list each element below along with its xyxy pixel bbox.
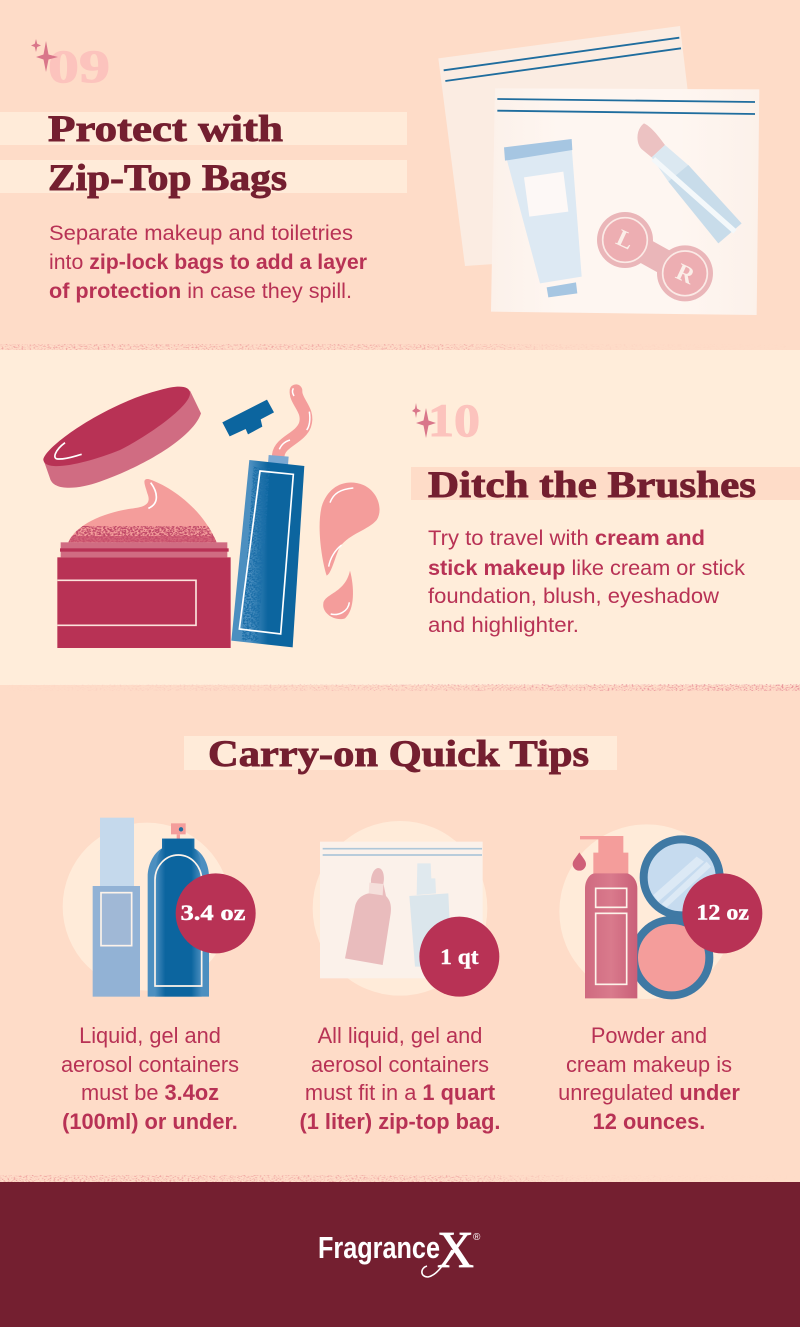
body text: Try to travel with cream and	[428, 527, 705, 550]
badge: 12 oz: 12 oz	[696, 899, 749, 924]
icon: lotion tube	[504, 139, 582, 297]
panel: section 09 background	[0, 0, 800, 350]
body text	[49, 222, 367, 303]
icon: jar	[57, 542, 231, 648]
heading: Carry-on Quick Tips: Carry-on Quick Tips	[208, 734, 589, 775]
text: powder and cream: Powder and	[591, 1023, 707, 1048]
panel: quick tips background	[0, 685, 800, 1182]
illustration: zip-top bags	[438, 26, 759, 315]
panel: tip 12 oz	[558, 824, 762, 1134]
icon: contact lens case: R	[672, 259, 699, 290]
panel: tip 09 text	[0, 39, 407, 303]
panel: tip 10 text	[411, 395, 800, 637]
panel: section 10 background	[0, 350, 800, 685]
number 10 with sparkle	[412, 395, 480, 447]
front bag	[491, 88, 759, 315]
back bag	[438, 26, 700, 266]
panel: tip 1 qt	[299, 821, 501, 1134]
body text: foundation, blush, eyeshadow	[428, 585, 720, 608]
body text: and highlighter.	[428, 614, 579, 637]
text: liquid limit: aerosol containers	[61, 1052, 239, 1077]
text: liquid limit: (100ml) or under.	[62, 1109, 238, 1134]
icon: cream	[67, 479, 220, 543]
illustration: pump bottle and compacts	[559, 824, 762, 999]
text: liquid limit: must be 3.4oz	[81, 1080, 219, 1105]
heading: Protect with Zip-Top Bags	[0, 109, 407, 199]
footer band	[0, 1182, 800, 1327]
body text: into zip-lock bags to add a layer	[49, 251, 367, 274]
number 09 with sparkle: 09	[48, 41, 110, 93]
badge: 1 qt	[419, 917, 499, 997]
icon: jar lid	[43, 387, 201, 488]
logo: FragranceX: Fragrance	[318, 1230, 440, 1265]
badge: 3.4 oz	[176, 873, 256, 953]
text: powder and cream: 12 ounces.	[593, 1109, 705, 1134]
icon: lipstick	[637, 123, 742, 243]
badge: 12 oz	[682, 873, 762, 953]
logo: FragranceX: X	[437, 1222, 474, 1279]
text: quart bag	[299, 1023, 501, 1134]
badge: 3.4 oz: 3.4 oz	[180, 900, 245, 925]
heading: Protect with Zip-Top Bags: Zip-Top Bags	[48, 158, 287, 199]
illustration: bottle and aerosol	[63, 818, 256, 997]
text: powder and cream: unregulated under	[558, 1080, 740, 1105]
icon: squeezed tube	[222, 388, 310, 647]
icon: contact lens case: L	[612, 225, 638, 255]
heading: Ditch the Brushes: Ditch the Brushes	[428, 465, 756, 506]
body text: Separate makeup and toiletries	[49, 222, 353, 245]
text: powder and cream: cream makeup is	[566, 1052, 732, 1077]
icon: contact lens case	[597, 212, 713, 301]
panel: tip 3.4 oz	[61, 818, 256, 1134]
illustration: cream jar and tube	[43, 387, 380, 648]
text: quart bag: (1 liter) zip-top bag.	[299, 1109, 501, 1134]
text: liquid limit	[61, 1023, 239, 1134]
heading: Protect with Zip-Top Bags: Protect with	[48, 109, 284, 150]
badge: 1 qt: 1 qt	[440, 944, 479, 969]
logo: FragranceX: ®	[473, 1232, 481, 1243]
text: quart bag: aerosol containers	[311, 1052, 489, 1077]
illustration: clear zip bag with bottles	[313, 821, 499, 997]
body text	[428, 527, 746, 637]
text: quart bag: All liquid, gel and	[318, 1023, 482, 1048]
body text: stick makeup like cream or stick	[428, 557, 746, 580]
icon: cream drops	[320, 483, 380, 619]
logo: FragranceX	[318, 1222, 481, 1279]
text: powder and cream	[558, 1023, 740, 1134]
number 09 with sparkle	[31, 39, 110, 93]
body text: of protection in case they spill.	[49, 280, 352, 303]
number 10 with sparkle: 10	[428, 395, 480, 447]
text: liquid limit: Liquid, gel and	[79, 1023, 221, 1048]
text: quart bag: must fit in a 1 quart	[305, 1080, 495, 1105]
